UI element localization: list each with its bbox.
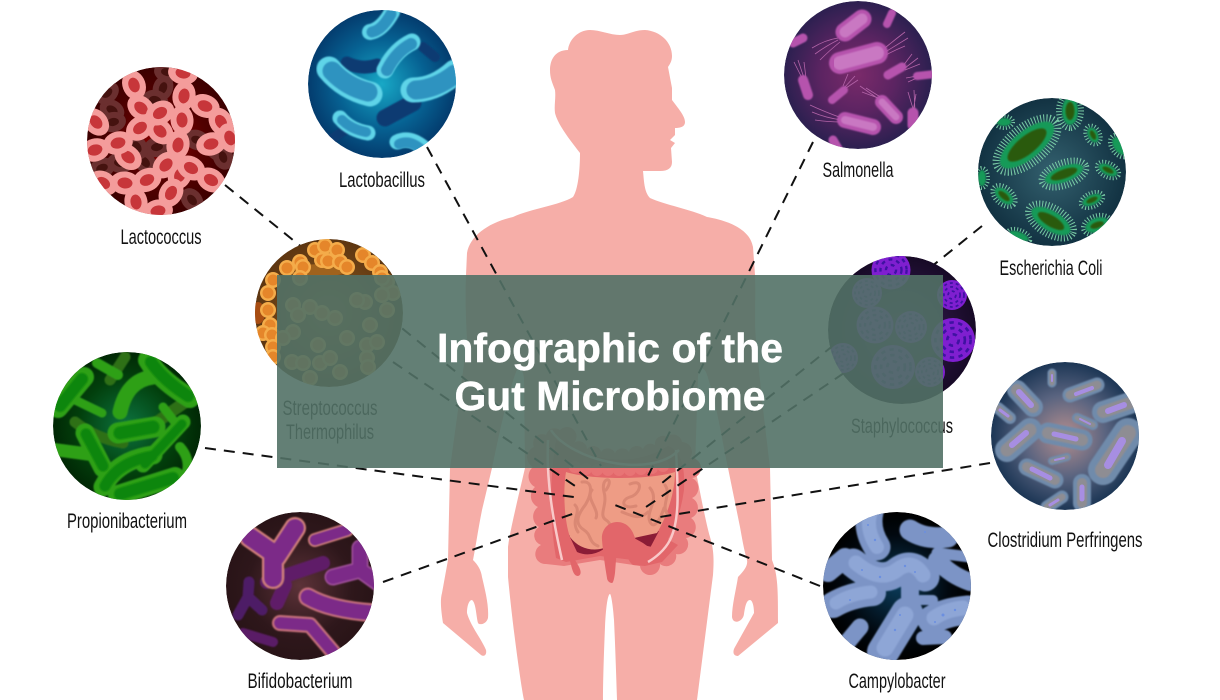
label: Clostridium Perfringens: Clostridium Perfringens bbox=[988, 529, 1142, 552]
label: Lactobacillus: Lactobacillus bbox=[339, 169, 425, 192]
label: Salmonella: Salmonella bbox=[822, 159, 894, 182]
dark mesentery patches bbox=[569, 531, 659, 554]
colon outer scalloped frame bbox=[527, 427, 701, 575]
colon inner band bbox=[551, 440, 684, 562]
connector: Lactococcus bbox=[225, 185, 592, 482]
connector: Clostridium Perfringens bbox=[660, 463, 990, 517]
bacterium: Escherichia Coli bbox=[976, 94, 1134, 246]
label: Streptococcus Thermophilus: Thermophilus bbox=[286, 421, 374, 444]
transverse colon scallops bbox=[569, 460, 669, 476]
title: Gut Microbiome bbox=[454, 373, 766, 419]
label: Streptococcus Thermophilus bbox=[282, 397, 378, 444]
connector: Streptococcus bbox=[393, 362, 578, 488]
white colon highlights bbox=[548, 430, 679, 562]
bacterium: Staphylococcus bbox=[828, 250, 976, 404]
label: Bifidobacterium: Bifidobacterium bbox=[248, 670, 352, 693]
small intestine folds bbox=[575, 480, 668, 546]
bacterium: Clostridium Perfringens bbox=[991, 362, 1139, 510]
connector: Propionibacterium bbox=[205, 448, 581, 498]
label: Lactococcus: Lactococcus bbox=[120, 226, 202, 249]
bacterium: Propionibacterium bbox=[50, 352, 201, 500]
appendix bbox=[566, 553, 581, 576]
connector: Staphylococcus bbox=[643, 373, 844, 509]
connector: Lactobacillus bbox=[427, 147, 601, 466]
label: Propionibacterium: Propionibacterium bbox=[67, 510, 187, 533]
bacterium: Streptococcus Thermophilus bbox=[251, 238, 403, 387]
title: Infographic of the bbox=[437, 325, 783, 371]
label: Campylobacter: Campylobacter bbox=[848, 670, 946, 693]
connector: Campylobacter bbox=[615, 505, 820, 586]
label: Streptococcus Thermophilus: Streptococcus bbox=[282, 397, 378, 420]
bacterium: Lactococcus bbox=[87, 67, 235, 215]
connector: Escherichia Coli bbox=[657, 226, 982, 487]
connector: Bifidobacterium bbox=[383, 513, 575, 582]
large intestine and small intestine bbox=[527, 427, 701, 583]
bacterium: Bifidobacterium bbox=[226, 512, 378, 660]
label: Staphylococcus: Staphylococcus bbox=[851, 415, 953, 438]
label: Escherichia Coli: Escherichia Coli bbox=[1000, 257, 1102, 280]
bacterium: Salmonella bbox=[784, 1, 935, 152]
title bbox=[437, 325, 783, 419]
human body silhouette bbox=[441, 30, 778, 700]
sigmoid colon and rectum bbox=[602, 522, 678, 583]
small intestine bbox=[564, 472, 675, 550]
bacterium: Lactobacillus bbox=[308, 10, 456, 158]
dashed connector lines bbox=[205, 142, 990, 586]
connector: Salmonella bbox=[645, 142, 813, 482]
title overlay panel bbox=[277, 275, 943, 468]
bacterium: Campylobacter bbox=[823, 512, 971, 660]
